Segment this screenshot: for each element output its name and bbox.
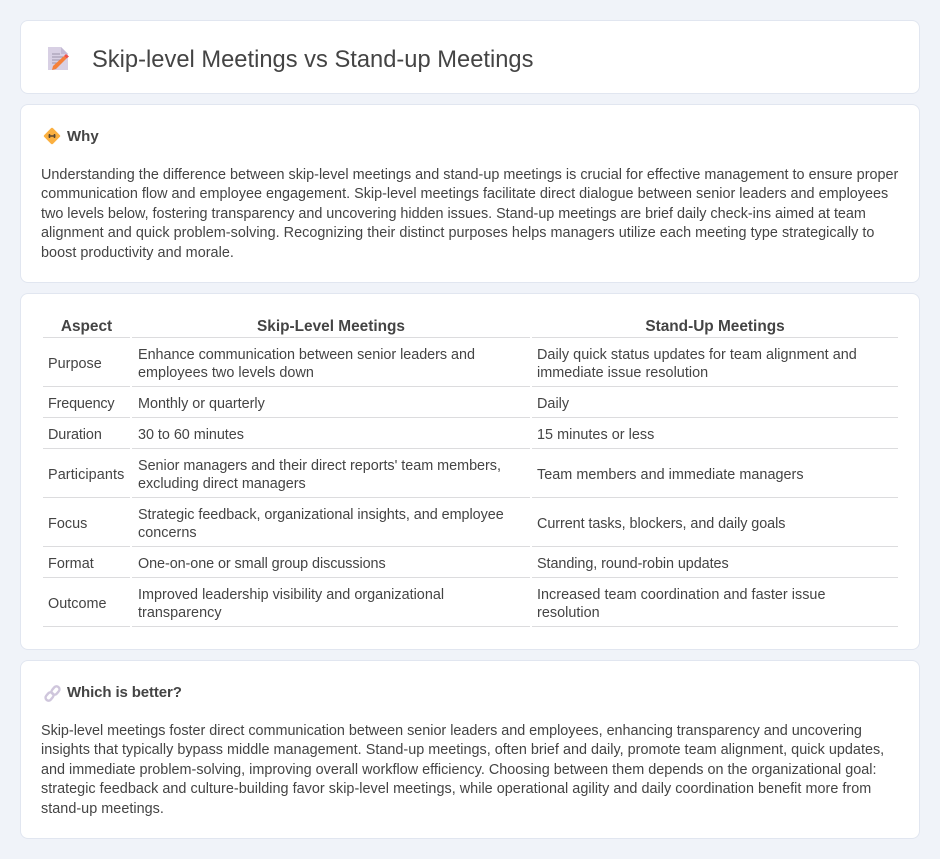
heading: why: Why (67, 128, 99, 145)
panel: which is better (20, 660, 920, 839)
row: purpose (48, 347, 857, 381)
row: participants: excluding direct managers (138, 476, 306, 492)
table header: Stand-Up Meetings (645, 318, 785, 335)
text block: why (41, 166, 898, 260)
row: focus: Current tasks, blockers, and daily goals (537, 516, 785, 532)
text block: which is better: insights that typically bypass middle management. Stand-up meetings, often brief and daily, promote team alignment, quick updates, (41, 742, 884, 758)
row: purpose: Purpose (48, 356, 102, 372)
row: participants (48, 458, 804, 492)
panel: title card (20, 20, 920, 94)
text block: which is better: and immediate problem-solving, improving overall workflow efficiency. Choosing between them depends on the organizational goal: (41, 762, 876, 778)
row: duration (48, 427, 654, 443)
row: participants: Senior managers and their direct reports' team members, (138, 458, 501, 474)
row: focus (48, 507, 785, 541)
row: format (48, 556, 729, 572)
icon: chain link (44, 685, 61, 702)
row: participants: Team members and immediate managers (537, 467, 804, 483)
text block: why: communication flow and employee engagement. Skip-level meetings facilitate direct dialogue between senior leaders and employees (41, 186, 888, 202)
table header: Aspect (61, 318, 112, 335)
text block: why: two levels below, fostering transparency and uncovering hidden issues. Stand-up meetings are brief daily check-ins aimed at team (41, 206, 866, 222)
row: frequency (48, 396, 569, 412)
row: focus: Focus (48, 516, 87, 532)
row: duration: 15 minutes or less (537, 427, 654, 443)
table header: Skip-Level Meetings (257, 318, 405, 335)
row: outcome: Outcome (48, 596, 107, 612)
row: frequency: Monthly or quarterly (138, 396, 265, 412)
row: duration: Duration (48, 427, 102, 443)
row: purpose: Enhance communication between senior leaders and (138, 347, 475, 363)
table header (61, 318, 785, 335)
row: outcome: transparency (138, 605, 222, 621)
row: purpose: immediate issue resolution (537, 365, 708, 381)
row: outcome: Improved leadership visibility and organizational (138, 587, 444, 603)
row: purpose: employees two levels down (138, 365, 314, 381)
text block: why: alignment and quick problem-solving. Recognizing their distinct purposes helps managers utilize each meeting type strategically to (41, 225, 874, 241)
row: purpose: Daily quick status updates for team alignment and (537, 347, 857, 363)
title: Skip-level Meetings vs Stand-up Meetings (92, 47, 533, 73)
text block: why: boost productivity and morale. (41, 244, 234, 260)
row: duration: 30 to 60 minutes (138, 427, 244, 443)
row: format: Format (48, 556, 94, 572)
row: frequency: Daily (537, 396, 569, 412)
row: focus: concerns (138, 525, 197, 541)
row: outcome (48, 587, 826, 621)
row: participants: Participants (48, 467, 124, 483)
icon: warning diamond (44, 128, 60, 144)
panel: why (20, 104, 920, 283)
row: frequency: Frequency (48, 396, 114, 412)
text block: which is better: Skip-level meetings foster direct communication between senior leaders and employees, enhancing transparency and uncovering (41, 722, 862, 738)
row: outcome: resolution (537, 605, 600, 621)
text block: why: Understanding the difference between skip-level meetings and stand-up meetings is crucial for effective management to ensure proper (41, 166, 898, 182)
panel: comparison table (20, 293, 920, 650)
row: focus: Strategic feedback, organizational insights, and employee (138, 507, 504, 523)
row: format: Standing, round-robin updates (537, 556, 729, 572)
text block: which is better (41, 722, 884, 816)
row: format: One-on-one or small group discussions (138, 556, 386, 572)
icon: document with pencil (48, 47, 69, 70)
text block: which is better: strategic feedback and culture-building favor skip-level meetings, while operational agility and daily coordination benefit more from (41, 781, 871, 797)
text block: which is better: stand-up meetings. (41, 800, 164, 816)
heading: which is better: Which is better? (67, 684, 182, 700)
row: outcome: Increased team coordination and faster issue (537, 587, 826, 603)
